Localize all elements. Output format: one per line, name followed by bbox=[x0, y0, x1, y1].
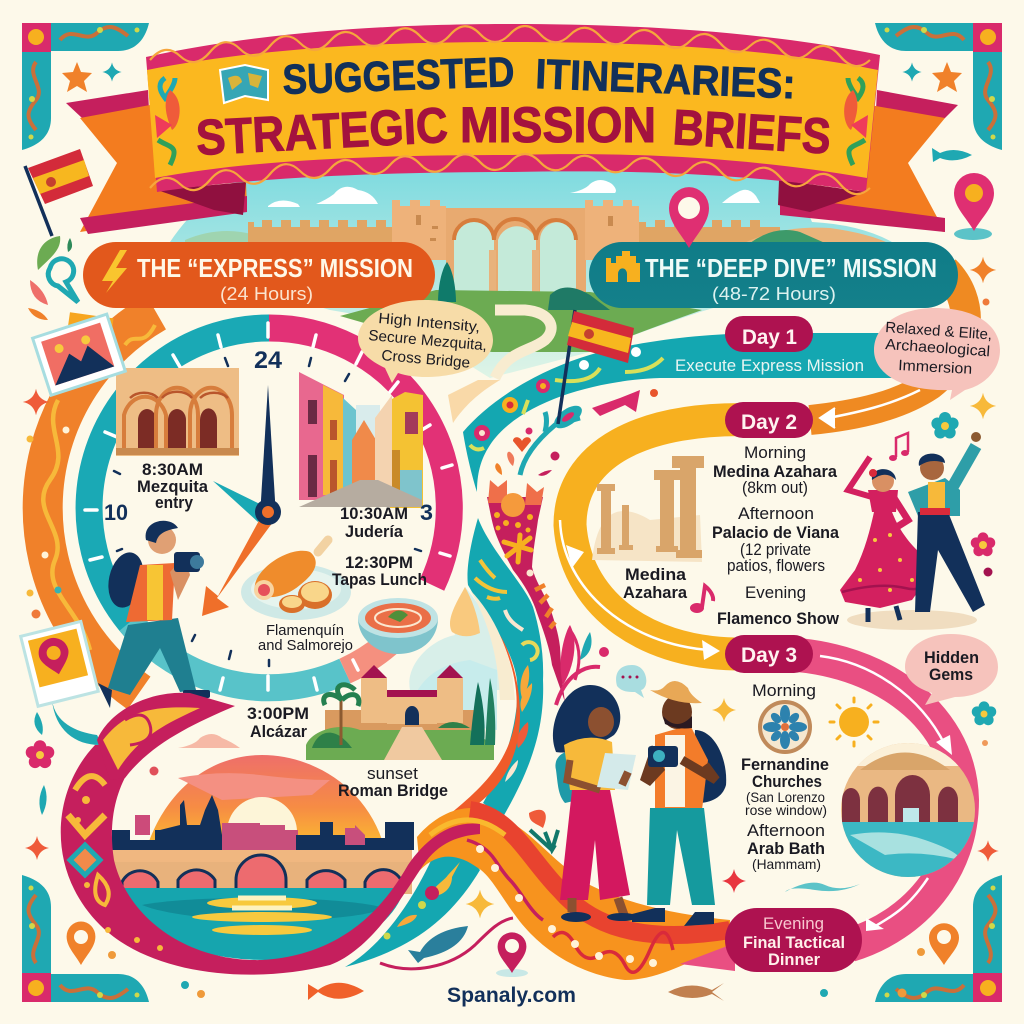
spanish flag left bbox=[25, 149, 93, 236]
photographer traveller bbox=[98, 521, 210, 708]
text: day 2 schedule: Evening bbox=[745, 584, 806, 602]
icon: world map bbox=[220, 65, 268, 103]
river bbox=[115, 888, 405, 960]
teal lower ribbon bbox=[345, 840, 480, 967]
pink tail into final pill bbox=[680, 943, 735, 971]
text: day 3 churches and bath bbox=[741, 755, 829, 872]
teal Day 1 ribbon bbox=[463, 333, 895, 492]
day 3 pill bbox=[725, 635, 813, 673]
text: day 2 schedule: Flamenco Show bbox=[717, 610, 839, 628]
ring: teal half bbox=[89, 328, 269, 643]
crest of the swoosh under traveller bbox=[52, 693, 235, 780]
skyline navy bbox=[112, 795, 222, 850]
long hand: orange bbox=[202, 515, 273, 616]
small pink cloud bbox=[178, 734, 240, 748]
text: day 3 churches and bath: (Hammam) bbox=[752, 856, 821, 872]
clock hands bbox=[202, 385, 281, 616]
title line 2: MISSION bbox=[460, 97, 656, 153]
text: day 3 morning: Morning bbox=[752, 682, 816, 700]
text: 10:30AM Judería: 10:30AM bbox=[340, 504, 408, 523]
orange strand bbox=[445, 635, 520, 818]
final dinner pill: Evening bbox=[763, 915, 824, 933]
ring: pink half bbox=[269, 328, 449, 585]
text: 8:30AM Mezquita entry: Mezquita bbox=[137, 477, 209, 496]
medina azahara ruins bbox=[592, 456, 704, 562]
icon: sun bbox=[830, 698, 878, 746]
callout: hidden gems: Gems bbox=[929, 666, 973, 684]
band ornament right bbox=[844, 78, 868, 165]
text: 8:30AM Mezquita entry bbox=[137, 460, 209, 512]
callout: hidden gems: Hidden bbox=[924, 649, 979, 667]
text: day 2 schedule: Afternoon bbox=[738, 505, 814, 523]
text: 8:30AM Mezquita entry: 8:30AM bbox=[142, 460, 203, 479]
flamenco dancers bbox=[840, 432, 985, 630]
arab bath picture bbox=[841, 743, 975, 877]
peach path stub bbox=[448, 380, 500, 423]
map pin bottom left bbox=[67, 922, 95, 965]
skyline right bbox=[296, 822, 414, 850]
clouds right bbox=[570, 180, 760, 203]
hub bbox=[255, 499, 281, 525]
band ornament left bbox=[155, 78, 180, 165]
callout: relaxed and elite: Immersion bbox=[898, 357, 973, 378]
callout: relaxed and elite bbox=[874, 308, 1000, 400]
small water motif bbox=[785, 883, 860, 892]
icon: castle bbox=[606, 251, 640, 282]
icon: fish lower centre bbox=[408, 926, 468, 963]
corner ornament: bottom left bbox=[22, 875, 149, 1002]
orange connector from Deep Dive to Day 2 bbox=[810, 270, 966, 428]
text: day 3 churches and bath: rose window) bbox=[745, 802, 827, 818]
clock numeral 24: 24 bbox=[254, 347, 283, 374]
deep dive mission pill bbox=[589, 242, 958, 308]
ring tick marks bbox=[85, 323, 452, 690]
sky dome bbox=[146, 755, 385, 850]
green hill bbox=[340, 290, 702, 352]
pale flame beside ribbon bbox=[409, 587, 515, 700]
spanish flag centre bbox=[558, 310, 634, 424]
title line 2: BRIEFS bbox=[671, 99, 832, 165]
text: Flamenquín and Salmorejo bbox=[258, 623, 353, 654]
day 2 pill bbox=[725, 402, 813, 438]
icon: music note bbox=[690, 586, 713, 613]
photo frame lower left bbox=[21, 621, 98, 706]
teal central crescent bbox=[467, 518, 543, 817]
yellow Day 2 loop bbox=[560, 420, 760, 660]
icon: orange fish bottom bbox=[308, 983, 364, 1000]
clouds bbox=[268, 187, 378, 207]
title line 1 bbox=[282, 48, 796, 107]
text: 8:30AM Mezquita entry: entry bbox=[155, 493, 193, 512]
text: day 2 schedule: (8km out) bbox=[742, 479, 808, 497]
text: day 3 churches and bath: (San Lorenzo bbox=[746, 789, 825, 805]
dancer: man bbox=[908, 432, 985, 612]
traveller: man bbox=[632, 681, 726, 926]
express mission pill bbox=[83, 242, 435, 308]
title banner bbox=[66, 24, 958, 234]
traveller: woman bbox=[553, 685, 637, 922]
text: 3:00PM Alcázar bbox=[247, 704, 309, 741]
text: execute express mission: Execute Express Mission bbox=[675, 356, 864, 375]
text: 10:30AM Judería: Judería bbox=[345, 522, 404, 541]
text: 12:30PM Tapas Lunch: 12:30PM bbox=[345, 553, 413, 572]
clock numeral 3: 3 bbox=[420, 500, 433, 525]
website footer: Spanaly.com bbox=[447, 984, 576, 1007]
final dinner pill: Final Tactical bbox=[743, 933, 845, 952]
text: day 3 churches and bath: Fernandine bbox=[741, 755, 829, 774]
text: day 3 churches and bath: Afternoon bbox=[747, 821, 825, 840]
clock face and ring bbox=[85, 323, 452, 690]
flame crown bbox=[488, 480, 544, 505]
text: sunset Roman Bridge: sunset bbox=[367, 764, 418, 783]
ring: salmon lower right bbox=[345, 640, 392, 671]
text: day 2 schedule: patios, flowers bbox=[727, 557, 825, 575]
hour hand: teal bbox=[213, 481, 268, 522]
band waves bbox=[150, 26, 870, 66]
icon: music note upper bbox=[889, 433, 909, 461]
sun bbox=[227, 797, 297, 867]
day 2 pill: Day 2 bbox=[741, 411, 797, 434]
flowing orange ribbon along the bottom bbox=[417, 808, 730, 980]
location pin over arcade bbox=[669, 187, 709, 248]
text: 3:00PM Alcázar: 3:00PM bbox=[247, 704, 309, 723]
text: day 3 churches and bath: Churches bbox=[752, 772, 822, 791]
inner dark ticks bbox=[114, 358, 421, 666]
orange ribbon around clock bbox=[42, 312, 156, 693]
text: 10:30AM Judería bbox=[340, 504, 408, 541]
duration: (24 Hours) bbox=[220, 284, 313, 304]
text: medina azahara label: Medina bbox=[625, 565, 687, 584]
text: day 2 schedule: Morning bbox=[744, 444, 806, 462]
food: flamenquín plate bbox=[241, 540, 351, 620]
day 3 pill: Day 3 bbox=[741, 644, 797, 667]
text: day 2 schedule: Palacio de Viana bbox=[712, 524, 840, 542]
map pin bottom centre bbox=[496, 932, 528, 977]
callout: high intensity: Cross Bridge bbox=[381, 347, 471, 372]
heading: THE “EXPRESS” MISSION bbox=[137, 253, 413, 283]
icon: rose window bbox=[758, 700, 812, 754]
heading: THE “DEEP DIVE” MISSION bbox=[645, 253, 937, 283]
title line 2 bbox=[195, 97, 832, 166]
callout: high intensity: High Intensity, bbox=[378, 310, 481, 336]
title line 2: STRATEGIC bbox=[195, 97, 449, 166]
left wall bbox=[248, 220, 392, 245]
pink Day 3 loop bbox=[770, 654, 962, 945]
icon: fish bottom right bbox=[668, 983, 724, 1001]
minute hand: navy bbox=[261, 385, 275, 518]
corner ornament: top right bbox=[875, 23, 1002, 150]
right wall bbox=[639, 220, 780, 245]
right tail bbox=[778, 90, 958, 232]
text: medina azahara label: Azahara bbox=[623, 583, 688, 602]
icon: teal fish top right bbox=[932, 148, 972, 162]
text: day 2 schedule: Medina Azahara bbox=[713, 463, 838, 481]
corner ornament: bottom right bbox=[875, 875, 1002, 1002]
day 1 pill bbox=[725, 316, 813, 352]
pink squiggle to pin bbox=[380, 918, 513, 969]
text: sunset Roman Bridge: Roman Bridge bbox=[338, 781, 448, 800]
cypress bbox=[438, 262, 456, 302]
winding road bbox=[495, 310, 551, 378]
callout: high intensity: Secure Mezquita, bbox=[368, 327, 488, 354]
duration: (48-72 Hours) bbox=[712, 284, 836, 304]
skyline pink bbox=[222, 823, 298, 850]
text: 12:30PM Tapas Lunch bbox=[332, 553, 427, 589]
title line 1: ITINERARIES: bbox=[535, 50, 796, 107]
leaf accents bbox=[37, 236, 60, 270]
dancer: woman bbox=[840, 457, 932, 622]
judería street picture bbox=[299, 372, 423, 508]
text: sunset Roman Bridge bbox=[338, 764, 448, 800]
bridge deck bbox=[112, 850, 412, 862]
day 1 pill: Day 1 bbox=[742, 326, 797, 349]
icon: lightning bbox=[102, 250, 127, 293]
band bbox=[146, 24, 880, 192]
text: medina azahara label bbox=[623, 565, 688, 602]
arcade bbox=[446, 208, 586, 292]
text: 12:30PM Tapas Lunch: Tapas Lunch bbox=[332, 570, 427, 589]
alcázar picture bbox=[306, 660, 497, 760]
band waves lower bbox=[150, 154, 870, 194]
final dinner pill: Dinner bbox=[768, 950, 820, 969]
crimson goblet ribbon bbox=[487, 480, 565, 702]
text: day 2 schedule: (12 private bbox=[740, 541, 811, 559]
food: salmorejo bowl bbox=[358, 598, 438, 654]
clock numeral 10: 10 bbox=[104, 500, 128, 525]
bridge arches bbox=[122, 855, 402, 893]
text: day 3 churches and bath: Arab Bath bbox=[747, 839, 825, 858]
text: day 2 schedule bbox=[712, 444, 840, 628]
title line 1: SUGGESTED bbox=[282, 48, 515, 103]
crimson C swoosh framing the bridge bbox=[61, 745, 480, 975]
photo frame top left bbox=[33, 312, 125, 395]
mezquita arches picture bbox=[116, 368, 239, 456]
text: 3:00PM Alcázar: Alcázar bbox=[250, 722, 307, 741]
speech bubble bbox=[616, 665, 646, 698]
callout: relaxed and elite: Relaxed & Elite, bbox=[885, 319, 993, 343]
decorative leaves between ribbons bbox=[495, 389, 658, 850]
right tower bbox=[585, 200, 639, 260]
ring: pale teal lower bbox=[130, 622, 345, 688]
callout: relaxed and elite: Archaeological bbox=[885, 336, 991, 360]
left tower bbox=[392, 200, 446, 260]
map pin bottom right bbox=[929, 923, 959, 965]
landscape backdrop with castle walls bbox=[130, 170, 905, 378]
callout: high intensity bbox=[358, 300, 493, 383]
text: Flamenquín and Salmorejo: Flamenquín bbox=[266, 623, 344, 639]
corner ornament: top left bbox=[22, 23, 149, 150]
map pin top right bbox=[954, 173, 994, 240]
callout: hidden gems bbox=[905, 634, 998, 705]
text: Flamenquín and Salmorejo: and Salmorejo bbox=[258, 638, 353, 654]
left tail bbox=[66, 90, 247, 234]
couple of travellers bbox=[553, 665, 726, 926]
sunset bridge scene bbox=[112, 755, 414, 960]
final dinner pill bbox=[725, 908, 862, 972]
